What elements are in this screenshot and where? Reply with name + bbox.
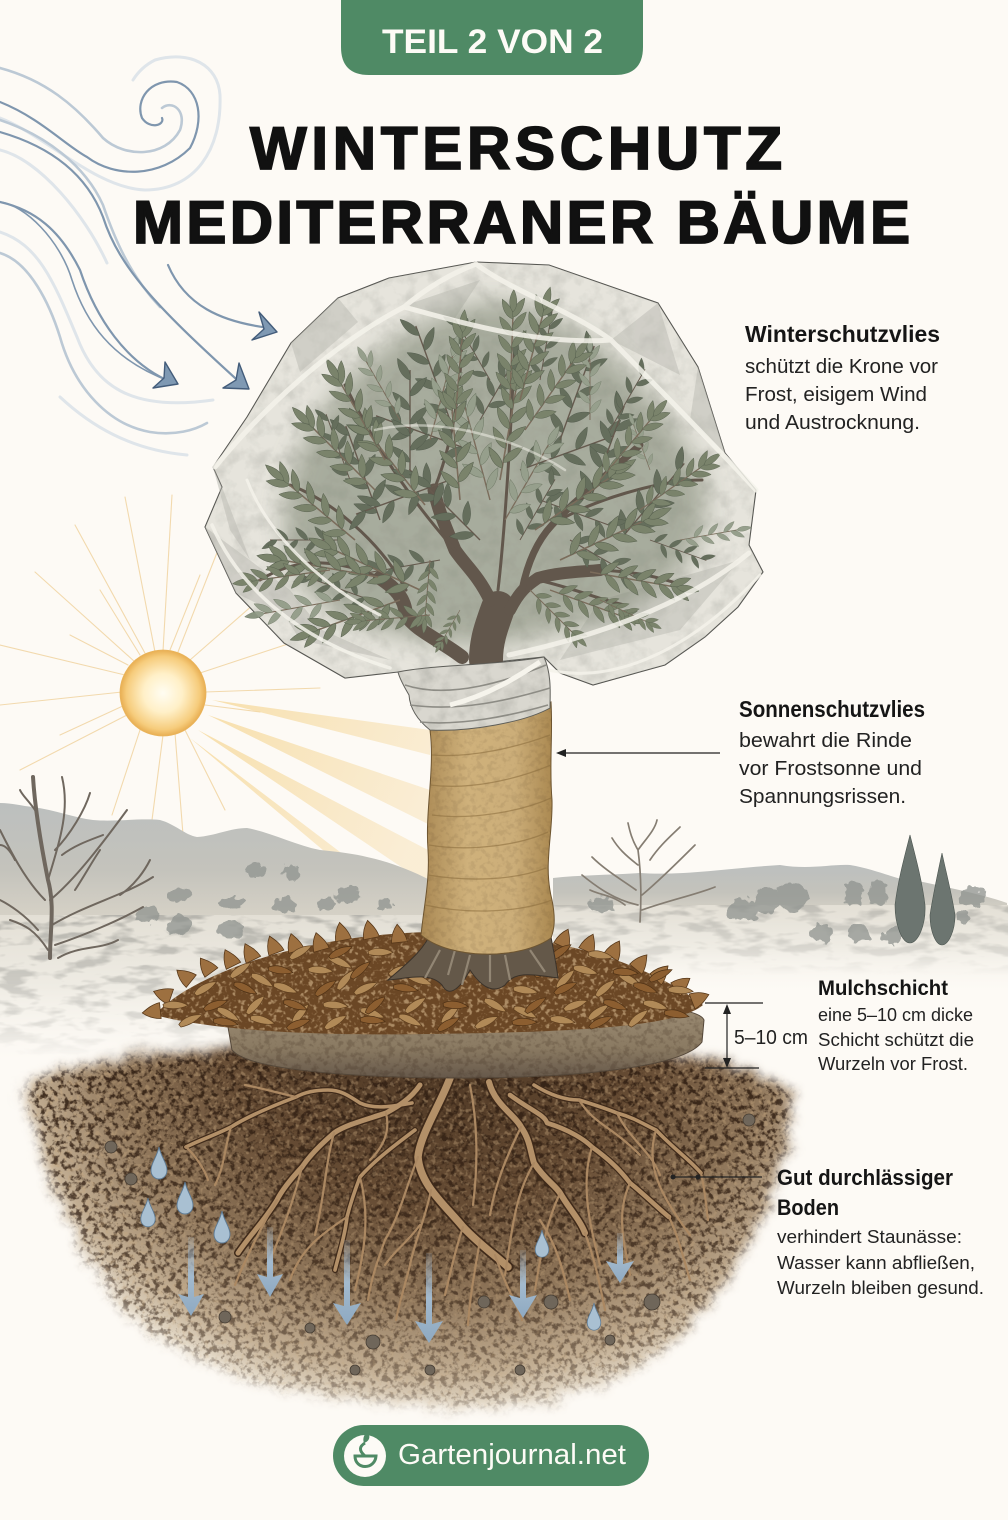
olive foliage mass [284,300,707,645]
mulch depth measure [705,1003,808,1068]
drainage drops and arrows [141,1147,634,1343]
title [133,115,910,256]
bare shrub center [582,820,715,922]
label: Mulchschicht: Schicht schützt die [818,1030,974,1050]
label: Mulchschicht: Mulchschicht [818,977,948,1000]
water drops [141,1147,601,1330]
label: Mulchschicht: eine 5–10 cm dicke [818,1005,973,1025]
background landscape [0,777,1008,1060]
footer badge [333,1425,649,1486]
label: Winterschutzvlies [745,321,940,434]
label: Gut durchlässiger Boden: Wurzeln bleiben gesund. [777,1277,984,1298]
left hills [0,803,430,925]
label: Sonnenschutzvlies: bewahrt die Rinde [739,730,912,752]
mulch depth measure: 5–10 cm [734,1027,808,1049]
root flare at trunk base [388,930,558,991]
fleece folds [212,264,760,673]
fleece tie around neck [398,657,550,730]
label: Gut durchlässiger Boden: verhindert Staunässe: [777,1226,962,1247]
sun with rays [0,495,430,915]
label: Gut durchlässiger Boden: Boden [777,1195,839,1220]
stone mulch disc [228,1004,704,1078]
arrow: soil callout [670,1174,762,1180]
bare shrub left [0,777,153,958]
label: Winterschutzvlies: Frost, eisigem Wind [745,384,927,406]
right hills [553,865,1007,915]
header tab: TEIL 2 VON 2 [382,23,603,61]
olive tree trunk and limbs [260,340,702,660]
soil cross-section [16,1038,802,1418]
label: Winterschutzvlies: schützt die Krone vor [745,356,938,378]
fleece shaded facets [205,280,740,660]
label: Sonnenschutzvlies [739,696,925,808]
snowy ground [0,905,1008,1060]
distant shrubs [137,862,987,944]
arrow: Sonnenschutzvlies callout [556,749,720,757]
drainage arrows [178,1227,634,1343]
label: Mulchschicht: Wurzeln vor Frost. [818,1054,968,1074]
title: MEDITERRANER BÄUME [133,189,910,256]
mulch spikes [141,919,712,1022]
fleece body [205,262,763,685]
wind swirls and arrows [0,57,277,455]
cypress trees [895,835,955,945]
label: Sonnenschutzvlies: Spannungsrissen. [739,786,906,808]
label: Winterschutzvlies: Winterschutzvlies [745,321,940,347]
mulch chips brown [203,943,690,1032]
fleece veil over tree [205,262,763,685]
label: Sonnenschutzvlies: Sonnenschutzvlies [739,696,925,722]
label: Winterschutzvlies: und Austrocknung. [745,412,920,434]
label: Gut durchlässiger Boden [777,1165,984,1298]
label: Sonnenschutzvlies: vor Frostsonne und [739,758,922,780]
footer badge: Gartenjournal.net [398,1439,626,1471]
fleece crown cover with olive tree [205,262,763,685]
header tab [341,0,643,75]
icon: sprout logo [344,1431,386,1477]
tree roots [186,1078,708,1325]
burlap trunk wrap [421,702,554,954]
olive sprigs [230,282,753,658]
title: WINTERSCHUTZ [250,115,782,182]
label: Gut durchlässiger Boden: Wasser kann abfließen, [777,1252,975,1273]
mulch chips tan [162,944,694,1031]
label: Mulchschicht [818,977,974,1074]
label: Gut durchlässiger Boden: Gut durchlässiger [777,1165,953,1190]
soil stones [105,1114,755,1375]
fleece mottling [205,262,763,685]
mulch layer [141,919,712,1034]
